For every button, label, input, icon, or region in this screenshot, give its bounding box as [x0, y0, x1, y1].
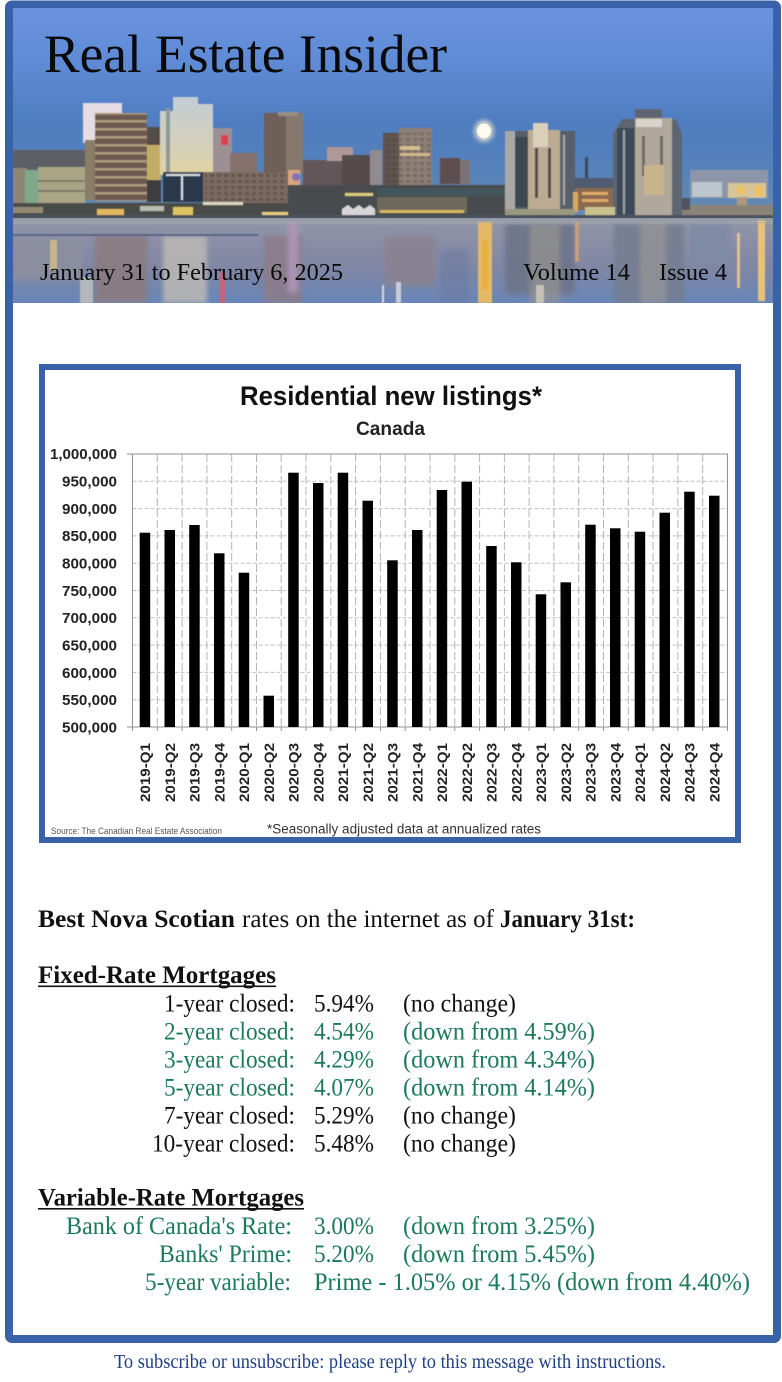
x axis labels: 2020-Q3 — [286, 743, 302, 802]
panel: residential new listings chart — [42, 367, 738, 840]
x axis labels: 2023-Q3 — [582, 743, 598, 802]
row: 5-year: 4.07% — [314, 1074, 374, 1102]
x axis labels: 2020-Q4 — [310, 743, 326, 802]
x axis labels: 2019-Q2 — [162, 743, 178, 802]
x axis labels: 2021-Q4 — [409, 743, 425, 802]
x axis labels: 2022-Q2 — [459, 743, 475, 802]
row: banks' prime: (down from 5.45%) — [403, 1241, 595, 1268]
row: 10-year: 5.48% — [314, 1130, 374, 1158]
y axis labels: 750,000 — [62, 584, 117, 600]
y axis labels: 900,000 — [62, 502, 117, 518]
volume: Volume 14 — [523, 259, 630, 286]
shoreline — [13, 203, 288, 218]
row: 7-year — [164, 1102, 516, 1130]
intro line: rates on the internet as of — [242, 906, 495, 933]
x axis labels: 2023-Q1 — [533, 743, 549, 802]
intro line — [38, 906, 635, 933]
row: 10-year: 10-year closed: — [152, 1130, 295, 1158]
row: 3-year: 4.29% — [314, 1046, 374, 1074]
x axis labels: 2024-Q2 — [657, 743, 673, 802]
x axis labels: 2020-Q2 — [261, 743, 277, 802]
x axis labels: 2019-Q3 — [186, 743, 202, 802]
title: Real Estate Insider — [44, 24, 447, 84]
right distant blocks — [690, 170, 768, 198]
row: 10-year — [152, 1130, 516, 1158]
variable rates table — [66, 1213, 750, 1296]
source note: Source: The Canadian Real Estate Association — [51, 826, 222, 837]
row: bank of canada: Bank of Canada's Rate: — [66, 1213, 292, 1240]
row: 7-year: 7-year closed: — [164, 1102, 295, 1130]
row: 3-year: (down from 4.34%) — [403, 1046, 595, 1074]
x axis labels: 2021-Q2 — [360, 743, 376, 802]
row: bank of canada: (down from 3.25%) — [403, 1213, 595, 1240]
x axis labels: 2021-Q3 — [384, 743, 400, 802]
x axis labels: 2022-Q4 — [508, 743, 524, 802]
x axis labels: 2021-Q1 — [335, 743, 351, 802]
row: 10-year: (no change) — [403, 1130, 516, 1158]
row: banks' prime — [159, 1241, 595, 1268]
y axis labels: 1,000,000 — [50, 447, 117, 463]
row: banks' prime: Banks' Prime: — [159, 1241, 292, 1268]
row: bank of canada — [66, 1213, 595, 1240]
y axis labels: 600,000 — [62, 666, 117, 682]
row: 5-year — [164, 1074, 595, 1102]
x axis labels: 2019-Q4 — [211, 743, 227, 802]
row: 1-year: 1-year closed: — [164, 990, 295, 1018]
intro line: Best Nova Scotian — [38, 906, 235, 933]
y axis labels: 650,000 — [62, 638, 117, 654]
x axis labels: 2022-Q3 — [484, 743, 500, 802]
heading: fixed-rate mortgages: Fixed-Rate Mortgages — [38, 962, 276, 989]
row: 5-year variable: 5-year variable: — [145, 1269, 291, 1296]
row: 2-year — [164, 1018, 595, 1046]
intro line: January 31st: — [500, 906, 635, 933]
y axis labels: 850,000 — [62, 529, 117, 545]
chart title: Residential new listings* — [240, 381, 542, 411]
row: 2-year: 4.54% — [314, 1018, 374, 1046]
left waterfront blocks — [13, 150, 85, 170]
y axis labels: 950,000 — [62, 474, 117, 490]
y axis labels — [50, 447, 117, 736]
row: 3-year — [164, 1046, 595, 1074]
x axis labels: 2024-Q1 — [632, 743, 648, 802]
x axis labels: 2024-Q4 — [706, 743, 722, 802]
x axis labels: 2020-Q1 — [236, 743, 252, 802]
chart subtitle: Canada — [356, 418, 425, 440]
x axis labels — [137, 743, 722, 802]
footer note: To subscribe or unsubscribe: please reply to this message with instructions. — [114, 1352, 666, 1373]
row: 5-year variable: Prime - 1.05% or 4.15% (down from 4.40%) — [314, 1269, 750, 1296]
x axis labels: 2022-Q1 — [434, 743, 450, 802]
x axis labels: 2024-Q3 — [682, 743, 698, 802]
y axis labels: 700,000 — [62, 611, 117, 627]
seasonally adjusted note: *Seasonally adjusted data at annualized rates — [267, 822, 541, 836]
x axis labels: 2023-Q4 — [607, 743, 623, 802]
row: 2-year: (down from 4.59%) — [403, 1018, 595, 1046]
row: 5-year: (down from 4.14%) — [403, 1074, 595, 1102]
header banner — [13, 8, 773, 303]
row: 1-year: (no change) — [403, 990, 516, 1018]
y axis labels: 500,000 — [62, 720, 117, 736]
row: 7-year: 5.29% — [314, 1102, 374, 1130]
row: 1-year — [164, 990, 516, 1018]
row: 2-year: 2-year closed: — [164, 1018, 295, 1046]
row: 7-year: (no change) — [403, 1102, 516, 1130]
x axis labels: 2019-Q1 — [137, 743, 153, 802]
row: 5-year: 5-year closed: — [164, 1074, 295, 1102]
y axis labels: 550,000 — [62, 693, 117, 709]
photo: Halifax skyline at dusk — [13, 8, 773, 303]
date line: January 31 to February 6, 2025 — [40, 259, 343, 286]
issue: Issue 4 — [659, 259, 727, 286]
heading: variable-rate mortgages: Variable-Rate Mortgages — [38, 1184, 304, 1212]
row: bank of canada: 3.00% — [314, 1213, 374, 1240]
left tower — [514, 130, 576, 210]
row: banks' prime: 5.20% — [314, 1241, 374, 1268]
y axis labels: 800,000 — [62, 556, 117, 572]
x axis labels: 2023-Q2 — [558, 743, 574, 802]
row: 3-year: 3-year closed: — [164, 1046, 295, 1074]
fixed rates table — [152, 990, 595, 1158]
bars — [140, 473, 719, 727]
right tower — [613, 109, 682, 217]
row: 1-year: 5.94% — [314, 990, 374, 1018]
